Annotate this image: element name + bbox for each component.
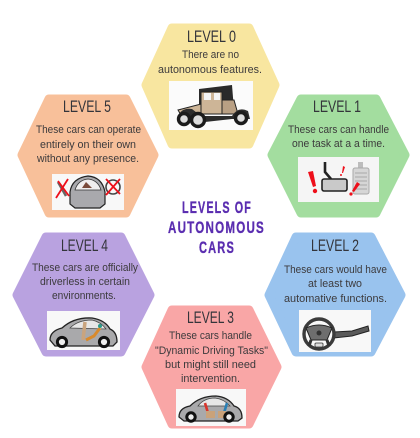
title [168,198,265,257]
text: level 5 description: entirely on their own [40,139,136,151]
red crosses [56,179,120,198]
text: level 5 description [36,124,141,165]
alert marks [308,166,360,196]
icon: steering wheel [299,310,371,352]
title: LEVELS OF [182,198,252,217]
heading: level 2: LEVEL 2 [311,236,359,255]
text: level 1 description: one task at a a time. [292,138,385,150]
icon: vintage car [169,81,253,130]
panel: level 1 [272,97,405,213]
text: level 5 description: without any presence. [36,153,139,165]
heading: level 0: LEVEL 0 [187,27,236,46]
text: level 0 description: There are no [182,49,239,61]
text: level 1 description: These cars can handle [288,124,389,136]
text: level 1 description [288,124,389,150]
text: level 4 description: driverless in certain [40,276,130,288]
text: level 3 description: intervention. [181,373,240,385]
icon: pedals with alerts [298,157,379,202]
heading: level 1: LEVEL 1 [313,97,361,116]
text: level 4 description [32,262,139,302]
panel: level 0 [146,27,275,144]
text: level 2 description: automative functions. [284,293,387,305]
heading: level 4: LEVEL 4 [61,236,108,255]
text: level 2 description: These cars would have [284,264,387,276]
icon: car with seated occupants [176,389,246,426]
icon: self-driving car with crossed-out controls [52,174,124,210]
heading: level 3: LEVEL 3 [187,308,234,327]
panel: level 2 [269,236,401,352]
wheels [178,112,246,126]
panel: level 5 [22,97,154,213]
text: level 0 description [158,49,262,76]
text: level 3 description: These cars handle [169,330,252,342]
text: level 5 description: These cars can operate [36,124,141,136]
text: level 2 description [284,264,387,305]
title: AUTONOMOUS [168,218,265,237]
text: level 3 description: "Dynamic Driving Tasks" [155,345,268,357]
text: level 0 description: autonomous features. [158,64,262,76]
panel: level 3 [146,308,277,426]
wheels [187,413,233,421]
text: level 4 description: These cars are officially [32,262,139,274]
wheels [57,337,109,347]
panel: level 4 [17,236,150,352]
text: level 2 description: at least two [308,278,362,290]
text: level 4 description: environments. [52,290,116,302]
title: CARS [199,238,235,257]
text: level 3 description: but might still need [165,359,256,371]
heading: level 5: LEVEL 5 [63,97,111,116]
icon: driverless car with relaxed occupants [47,311,120,350]
text: level 3 description [155,330,268,385]
